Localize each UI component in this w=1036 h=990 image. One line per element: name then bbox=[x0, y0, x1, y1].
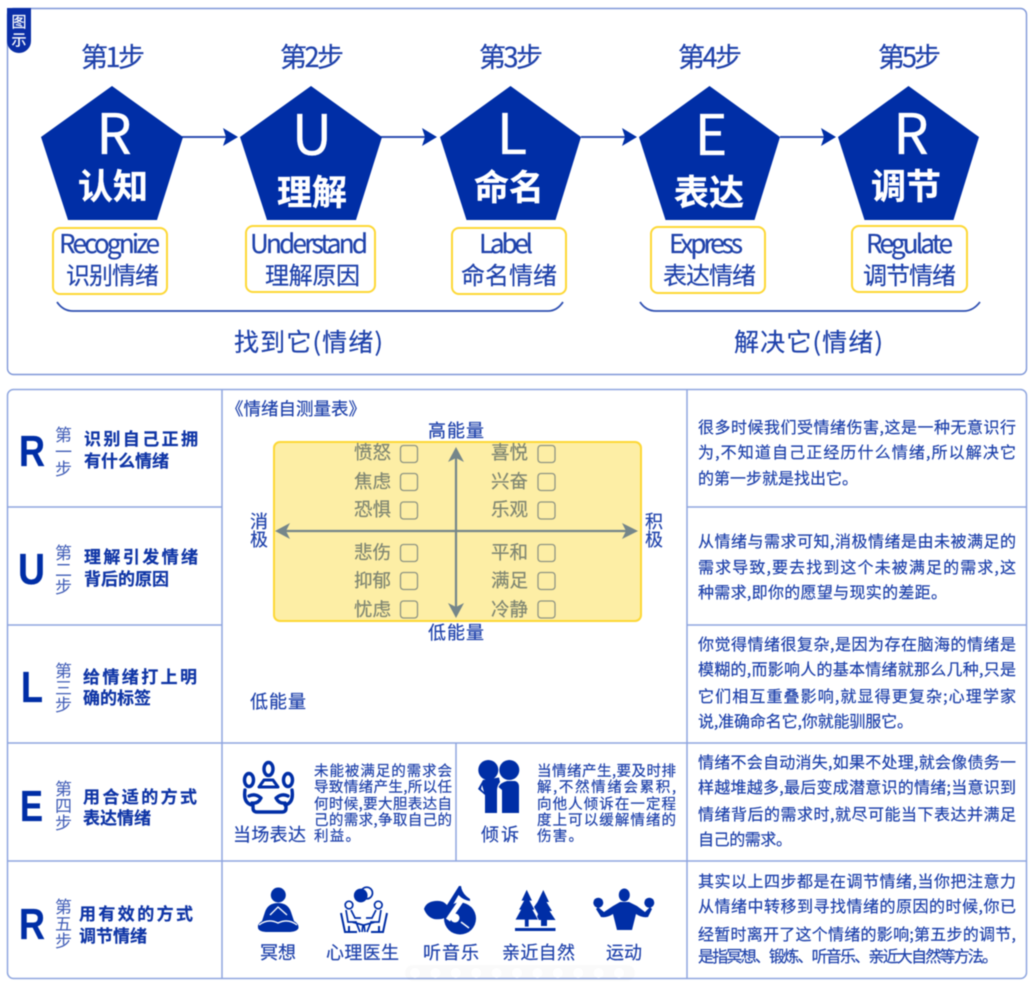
explanation: step 4: 样越堆越多,最后变成潜意识的情绪;当意识到 bbox=[698, 774, 1016, 798]
step 5 pentagon: R 调节: R bbox=[893, 90, 929, 171]
label box: Regulate: Regulate bbox=[866, 224, 953, 261]
description: confiding: 当情绪产生,要及时排 bbox=[537, 760, 676, 781]
axis labels: 极 bbox=[645, 526, 663, 552]
explanation: step 1: 为,不知道自己正经历什么情绪,所以解决它 bbox=[698, 439, 1016, 463]
row 2 heading: 背后的原因 bbox=[84, 565, 169, 590]
label: 倾诉: 倾诉 bbox=[481, 821, 519, 847]
row 4 heading: 用合适的方式 bbox=[83, 783, 197, 808]
icon: two people confiding bbox=[478, 760, 519, 813]
axis labels: 消 bbox=[250, 508, 268, 534]
step 3 pentagon: L 命名: L bbox=[497, 90, 527, 171]
label box: Understand: Understand bbox=[250, 224, 368, 261]
panel: RULER steps diagram bbox=[7, 8, 1026, 374]
description: confiding bbox=[537, 760, 676, 846]
explanation: step 3: 模糊的,而影响人的基本情绪就那么几种,只是 bbox=[698, 656, 1016, 680]
step 4 pentagon: E 表达 bbox=[639, 86, 780, 220]
step 5 pentagon: R 调节: 调节 bbox=[871, 159, 941, 210]
explanation: step 5: 从情绪中转移到寻找情绪的原因的时候,你已 bbox=[698, 893, 1016, 917]
description: confiding: 向他人倾诉在一定程 bbox=[537, 793, 676, 814]
row 3 heading: 步 bbox=[55, 691, 72, 716]
row 3 heading: 确的标签 bbox=[83, 684, 151, 709]
positive high-energy emotions: 喜悦 bbox=[491, 439, 528, 465]
label: 亲近自然: 亲近自然 bbox=[502, 939, 575, 965]
row 1 heading: R bbox=[19, 427, 45, 476]
row 1 heading bbox=[19, 421, 198, 480]
description: confiding: 伤害。 bbox=[537, 825, 583, 846]
step 2 pentagon: U 理解: U bbox=[292, 91, 332, 172]
explanation: step 2 bbox=[698, 528, 1016, 603]
label box: Label: Label bbox=[479, 224, 533, 261]
row 1 heading: 第 bbox=[55, 421, 72, 446]
step 3 pentagon: L 命名 bbox=[440, 86, 581, 220]
row 3 heading bbox=[21, 657, 197, 716]
label: 运动: 运动 bbox=[606, 939, 642, 965]
tag: 图示: 示 bbox=[11, 29, 27, 50]
step headings: 第2步 bbox=[280, 36, 344, 75]
label box: Express: Express bbox=[669, 224, 743, 261]
explanation: step 2: 从情绪与需求可知,消极情绪是由未被满足的 bbox=[698, 528, 1016, 552]
bracket: last two steps bbox=[640, 302, 980, 311]
description: confiding: 度上可以缓解情绪的 bbox=[537, 809, 676, 830]
self-assessment title: 《情绪自测量表》 bbox=[226, 396, 366, 421]
description: expressing on the spot: 何时候,要大胆表达自 bbox=[314, 793, 452, 814]
icon: psychologist bbox=[341, 887, 387, 932]
explanation: step 1: 的第一步就是找出它。 bbox=[698, 465, 858, 489]
explanation: step 4: 情绪背后的需求时,就尽可能当下表达并满足 bbox=[698, 801, 1016, 825]
label box: Understand bbox=[246, 224, 375, 292]
label box: Understand: 理解原因 bbox=[265, 256, 360, 291]
positive high-energy emotions bbox=[491, 439, 555, 522]
description: expressing on the spot: 导致情绪产生,所以任 bbox=[314, 776, 452, 797]
caption: 解决它(情绪): 解决它(情绪) bbox=[734, 323, 883, 359]
row 4 heading: 表达情绪 bbox=[83, 804, 151, 829]
row 5 heading: 第 bbox=[55, 893, 72, 918]
explanation: step 5: 是指冥想、锻炼、听音乐、亲近大自然等方法。 bbox=[698, 943, 998, 967]
positive low-energy emotions: 冷静 bbox=[491, 596, 528, 622]
explanation: step 2: 种需求,即你的愿望与现实的差距。 bbox=[698, 579, 947, 603]
axis labels: 积 bbox=[645, 508, 663, 534]
row 2 heading: 步 bbox=[55, 573, 72, 598]
label: 低能量: 低能量 bbox=[250, 688, 306, 714]
explanation: step 1 bbox=[698, 414, 1016, 489]
axis labels bbox=[250, 417, 663, 645]
step 5 pentagon: R 调节 bbox=[838, 86, 979, 220]
row 2 heading bbox=[18, 539, 198, 598]
description: expressing on the spot: 未能被满足的需求会 bbox=[314, 760, 452, 781]
label box: Regulate bbox=[852, 224, 967, 292]
explanation: step 4: 自己的需求。 bbox=[698, 826, 792, 850]
arrows between steps bbox=[182, 128, 836, 146]
icon: trees bbox=[515, 889, 556, 931]
row 5 heading: R bbox=[19, 900, 45, 949]
negative low-energy emotions bbox=[354, 539, 418, 622]
row 5 heading: 用有效的方式 bbox=[79, 900, 193, 925]
positive high-energy emotions: 乐观 bbox=[491, 496, 528, 522]
step 1 pentagon: R 认知: R bbox=[96, 90, 132, 171]
step headings: 第5步 bbox=[878, 36, 941, 75]
explanation: step 3: 说,准确命名它,你就能驯服它。 bbox=[698, 708, 913, 732]
step 4 pentagon: E 表达: E bbox=[695, 91, 727, 172]
label: 听音乐: 听音乐 bbox=[423, 939, 479, 965]
description: confiding: 解,不然情绪会累积, bbox=[537, 776, 676, 797]
axis labels: 极 bbox=[250, 526, 268, 552]
step headings: 第3步 bbox=[479, 36, 543, 75]
explanation: step 5: 经暂时离开了这个情绪的影响;第五步的调节, bbox=[698, 921, 1016, 945]
row 5 heading: 步 bbox=[55, 927, 72, 952]
step 3 pentagon: L 命名: 命名 bbox=[474, 160, 544, 211]
tag: 图示 bbox=[7, 8, 31, 53]
positive low-energy emotions: 平和 bbox=[491, 539, 528, 565]
explanation: step 4 bbox=[698, 749, 1016, 850]
negative high-energy emotions: 愤怒 bbox=[354, 439, 391, 465]
row 1 heading: 有什么情绪 bbox=[84, 447, 169, 472]
negative low-energy emotions: 忧虑 bbox=[354, 596, 391, 622]
step headings bbox=[81, 36, 941, 75]
explanation: step 4: 情绪不会自动消失,如果不处理,就会像债务一 bbox=[698, 749, 1016, 773]
label: 冥想: 冥想 bbox=[260, 939, 296, 965]
negative low-energy emotions: 抑郁 bbox=[354, 567, 391, 593]
explanation: step 3: 它们相互重叠影响,就显得更复杂;心理学家 bbox=[698, 683, 1016, 707]
step headings: 第1步 bbox=[81, 36, 145, 75]
row 4 heading bbox=[20, 775, 197, 834]
explanation: step 5: 其实以上四步都是在调节情绪,当你把注意力 bbox=[698, 868, 1016, 892]
negative high-energy emotions bbox=[354, 439, 418, 522]
panel: details table bbox=[7, 389, 1027, 979]
negative low-energy emotions: 悲伤 bbox=[354, 539, 391, 565]
explanation: step 3: 你觉得情绪很复杂,是因为存在脑海的情绪是 bbox=[698, 631, 1016, 655]
label box: Recognize: Recognize bbox=[59, 224, 160, 261]
label box: Recognize: 识别情绪 bbox=[66, 256, 159, 291]
icon: group meeting bbox=[244, 762, 292, 812]
icon: music bbox=[424, 886, 476, 934]
description: expressing on the spot: 利益。 bbox=[314, 825, 360, 846]
label box: Express: 表达情绪 bbox=[663, 256, 756, 291]
explanation: step 2: 需求导致,要去找到这个未被满足的需求,这 bbox=[698, 554, 1016, 578]
row 5 heading: 调节情绪 bbox=[79, 922, 147, 947]
icon: meditation bbox=[258, 888, 299, 932]
row 3 heading: 第 bbox=[55, 657, 72, 682]
axis labels: 低能量 bbox=[428, 619, 484, 645]
row 2 heading: 二 bbox=[55, 556, 72, 581]
label box: Express bbox=[651, 224, 765, 293]
row 2 heading: 第 bbox=[55, 539, 72, 564]
explanation: step 5 bbox=[698, 868, 1016, 967]
tag: 图示: 图 bbox=[11, 11, 27, 32]
row 1 heading: 识别自己正拥 bbox=[84, 425, 198, 450]
label box: Label: 命名情绪 bbox=[461, 256, 557, 291]
bracket: first three steps bbox=[57, 302, 563, 311]
row 4 heading: 四 bbox=[55, 792, 72, 817]
step 2 pentagon: U 理解 bbox=[240, 86, 382, 220]
step headings: 第4步 bbox=[678, 36, 742, 75]
row 4 heading: 第 bbox=[55, 775, 72, 800]
emotion quadrant chart bbox=[250, 417, 663, 645]
carousel dots bbox=[405, 965, 635, 981]
step 1 pentagon: R 认知: 认知 bbox=[78, 159, 148, 210]
step 1 pentagon: R 认知 bbox=[41, 86, 183, 220]
explanation: step 3 bbox=[698, 631, 1016, 732]
axes with arrowheads bbox=[275, 447, 638, 618]
row 2 heading: 理解引发情绪 bbox=[84, 543, 198, 568]
row 3 heading: 三 bbox=[55, 674, 72, 699]
explanation: step 1: 很多时候我们受情绪伤害,这是一种无意识行 bbox=[698, 414, 1016, 438]
axis labels: 高能量 bbox=[428, 417, 484, 443]
row 1 heading: 步 bbox=[55, 455, 72, 480]
description: expressing on the spot: 己的需求,争取自己的 bbox=[314, 809, 452, 830]
label box: Label bbox=[452, 224, 566, 294]
row 4 heading: E bbox=[20, 782, 43, 831]
label: 心理医生: 心理医生 bbox=[326, 939, 399, 965]
description: expressing on the spot bbox=[314, 760, 452, 846]
icon: bodybuilder bbox=[593, 888, 654, 930]
row 5 heading bbox=[19, 893, 193, 952]
label: 当场表达: 当场表达 bbox=[233, 821, 306, 847]
positive high-energy emotions: 兴奋 bbox=[491, 468, 528, 494]
row 5 heading: 五 bbox=[55, 910, 72, 935]
positive low-energy emotions: 满足 bbox=[491, 567, 528, 593]
label box: Recognize bbox=[53, 224, 167, 294]
negative high-energy emotions: 恐惧 bbox=[354, 496, 391, 522]
label box: Regulate: 调节情绪 bbox=[863, 256, 956, 291]
positive low-energy emotions bbox=[491, 539, 555, 622]
row 1 heading: 一 bbox=[55, 438, 72, 463]
row 4 heading: 步 bbox=[55, 809, 72, 834]
row 2 heading: U bbox=[18, 545, 45, 594]
step 4 pentagon: E 表达: 表达 bbox=[674, 165, 744, 216]
caption: 找到它(情绪): 找到它(情绪) bbox=[234, 323, 383, 359]
row 3 heading: 给情绪打上明 bbox=[83, 663, 197, 688]
step 2 pentagon: U 理解: 理解 bbox=[277, 165, 347, 216]
row 3 heading: L bbox=[21, 663, 43, 712]
negative high-energy emotions: 焦虑 bbox=[354, 468, 391, 494]
